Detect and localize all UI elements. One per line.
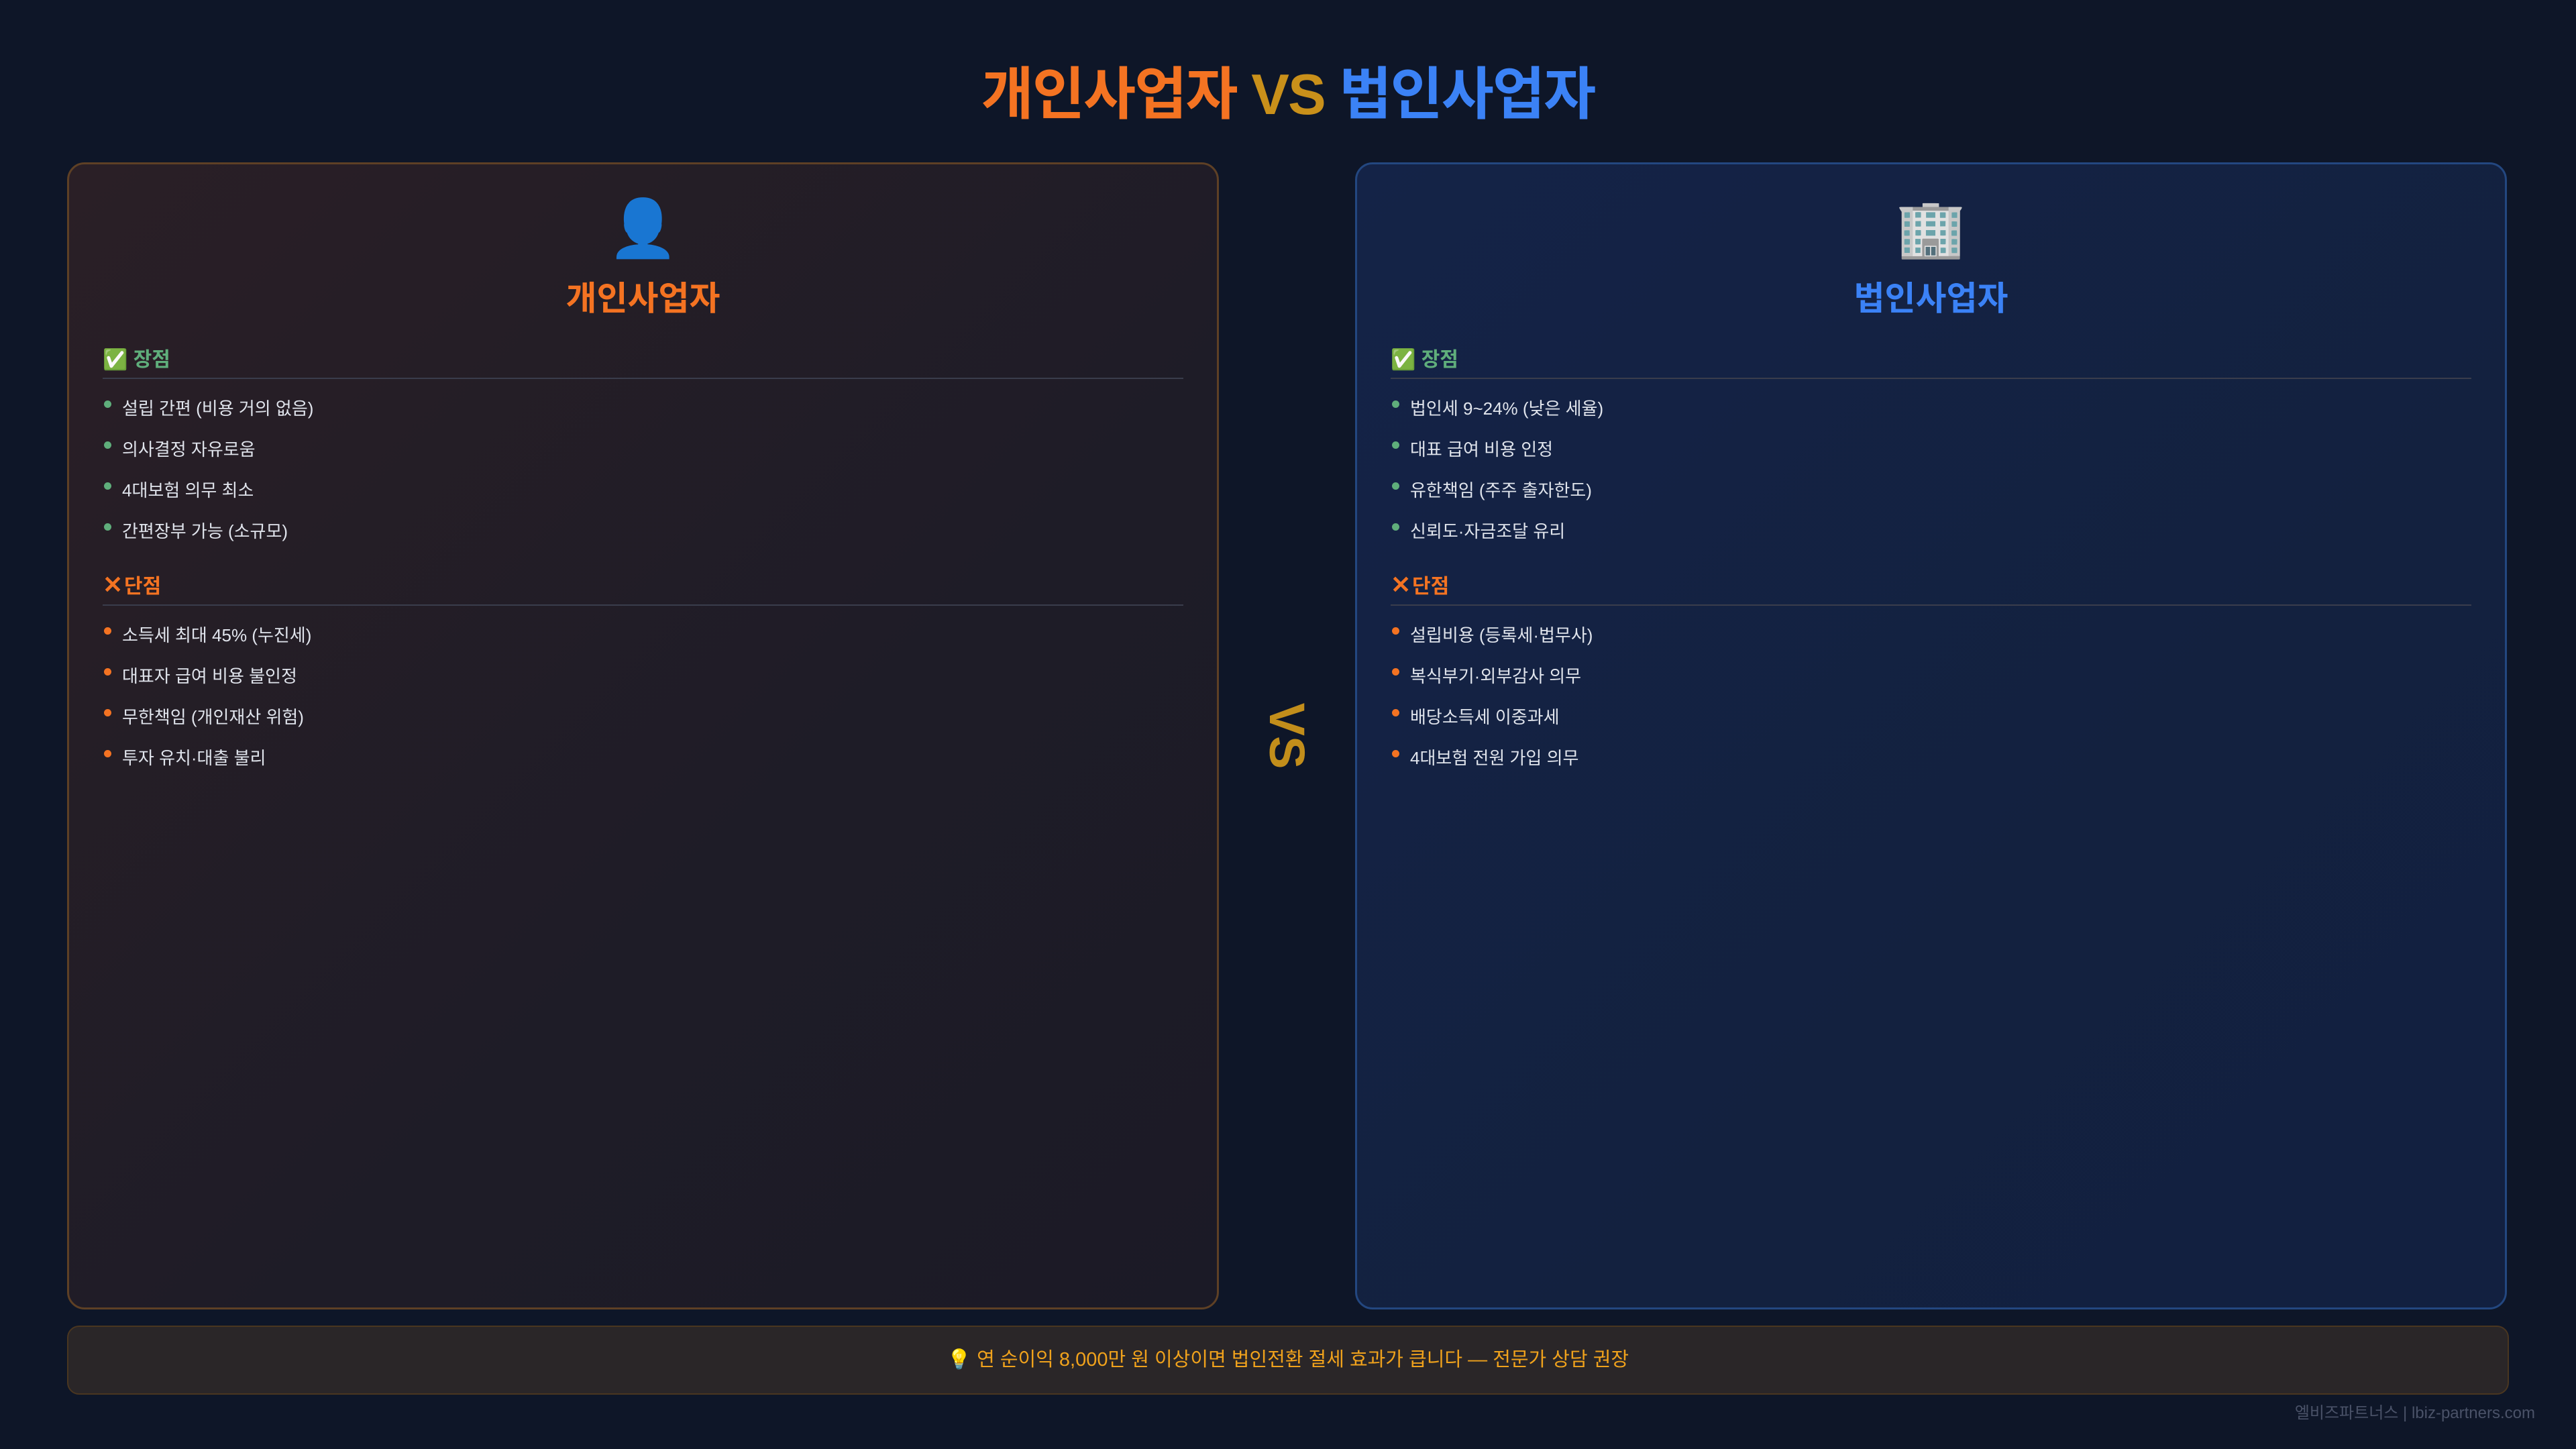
panel: individual	[67, 162, 1219, 1309]
callout: tip bar	[67, 1326, 2509, 1395]
list: cons	[1392, 625, 1593, 768]
list: pros: 유한책임 (주주 출자한도)	[1410, 480, 1592, 500]
heading: cons: 단점	[1412, 576, 1449, 598]
heading: pros	[1391, 343, 2471, 379]
list: pros: 의사결정 자유로움	[122, 439, 256, 460]
title: 개인사업자 VS 법인사업자	[981, 63, 1595, 127]
list: cons: 소득세 최대 45% (누진세)	[122, 625, 311, 645]
heading: cons: ✕	[103, 571, 123, 598]
heading: cons	[103, 570, 1183, 606]
heading: pros: ✅ 장점	[103, 349, 170, 371]
list: pros	[104, 398, 313, 541]
list: cons: 투자 유치·대출 불리	[122, 748, 266, 768]
list: cons	[104, 625, 311, 768]
list: pros: 대표 급여 비용 인정	[1410, 439, 1553, 460]
heading: pros: ✅ 장점	[1391, 349, 1458, 371]
heading: pros	[103, 343, 1183, 379]
icon: person: 👤	[608, 197, 678, 260]
list: cons: 배당소득세 이중과세	[1410, 707, 1560, 727]
vs label: VS	[1259, 703, 1315, 769]
list: cons: 복식부기·외부감사 의무	[1410, 666, 1581, 686]
panel: corporation	[1355, 162, 2507, 1309]
heading: cons	[1391, 570, 2471, 606]
footer credit: 엘비즈파트너스 | lbiz-partners.com	[2295, 1404, 2535, 1422]
list: cons: 4대보험 전원 가입 의무	[1410, 748, 1578, 768]
list: pros: 4대보험 의무 최소	[122, 480, 254, 500]
list: pros: 법인세 9~24% (낮은 세율)	[1410, 398, 1603, 419]
list: pros: 간편장부 가능 (소규모)	[122, 521, 288, 541]
list: cons: 무한책임 (개인재산 위험)	[122, 707, 304, 727]
list: cons: 설립비용 (등록세·법무사)	[1410, 625, 1593, 645]
heading: cons: 단점	[124, 576, 161, 598]
list: pros: 신뢰도·자금조달 유리	[1410, 521, 1565, 541]
heading: cons: ✕	[1391, 571, 1411, 598]
list: cons: 대표자 급여 비용 불인정	[122, 666, 297, 686]
list: pros	[1392, 398, 1603, 541]
panel title: 개인사업자	[566, 280, 720, 317]
list: pros: 설립 간편 (비용 거의 없음)	[122, 398, 313, 419]
icon: building: 🏢	[1896, 197, 1966, 260]
panel title: 법인사업자	[1854, 280, 2008, 317]
callout: tip bar: 💡 연 순이익 8,000만 원 이상이면 법인전환 절세 효과가 큽니다 — 전문가 상담 권장	[947, 1349, 1629, 1371]
